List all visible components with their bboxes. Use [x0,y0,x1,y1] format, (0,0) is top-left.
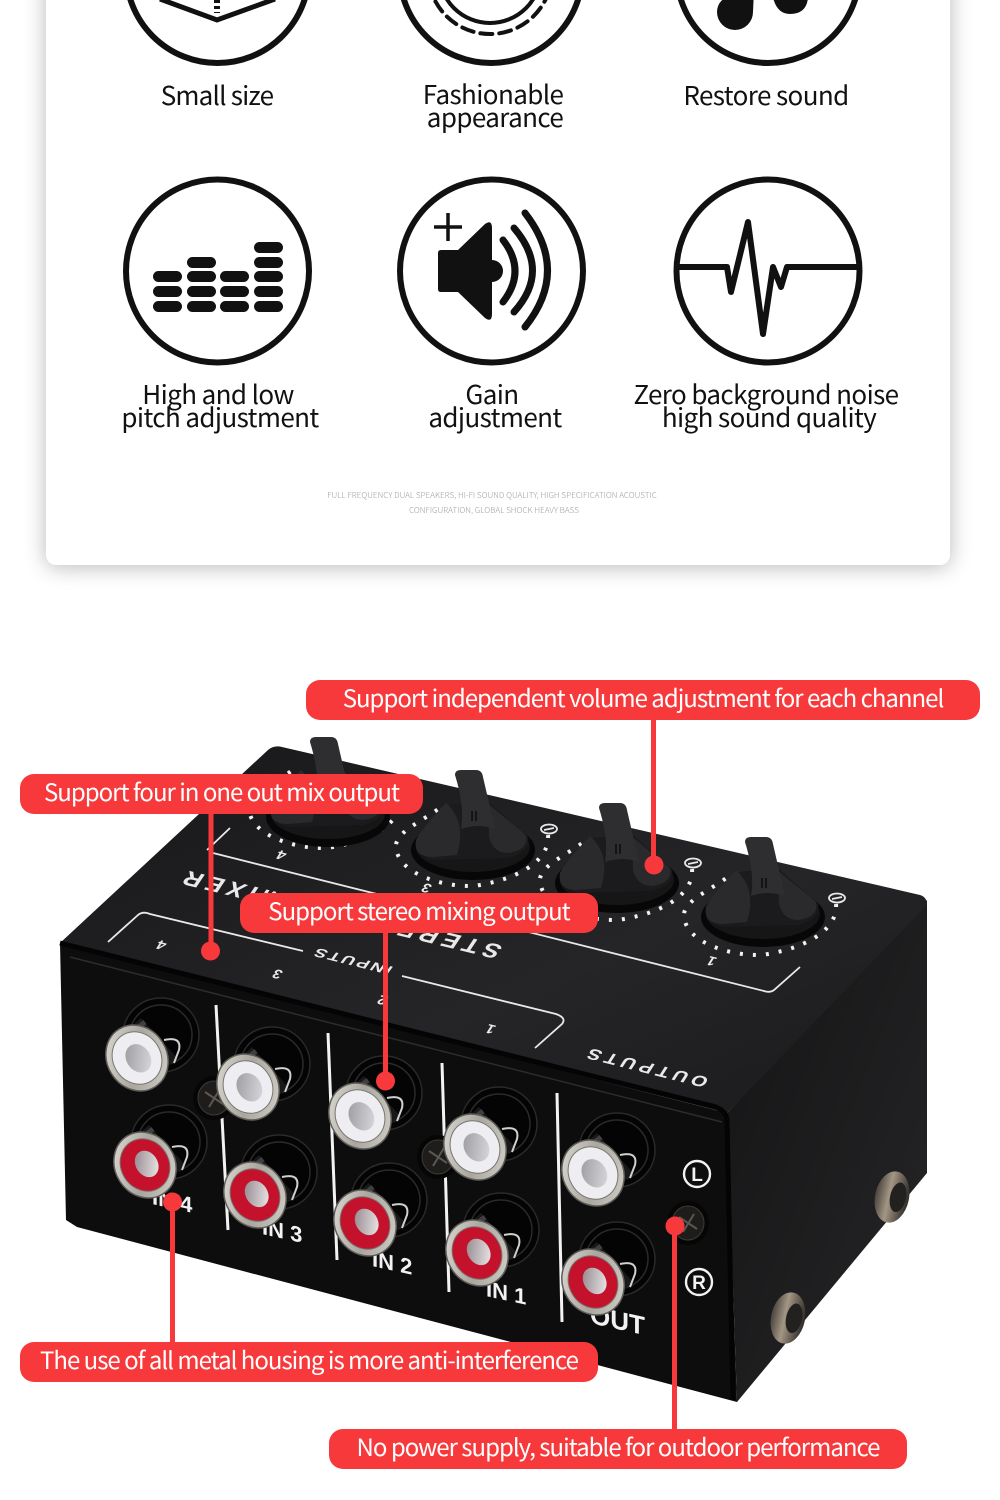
icon: gain speaker [400,180,583,362]
callout: independent volume: Support independent volume adjustment for each channel [343,679,943,714]
caption: zero background noise: Zero background noise [633,375,898,412]
caption: zero background noise [633,375,898,435]
jack labels: OUT [590,1299,645,1341]
icon: fashionable appearance [400,0,582,63]
callout: no power supply: No power supply, suitable for outdoor performance [357,1428,879,1463]
callout leader lines [163,715,684,1432]
icon: zero noise pulse [676,180,860,362]
jack labels [152,1184,645,1341]
printed text on top face: INPUTS [308,945,396,977]
caption: pitch adjustment: High and low [142,375,294,412]
icon: restore sound [676,0,860,63]
printed text on top face [153,846,720,1091]
printed text on top face: 1 [704,953,720,968]
volume dial scales [249,766,836,955]
L and R markers: R [692,1273,706,1294]
caption: gain adjustment: Gain [465,375,519,412]
printed text on top face: STEREO [364,910,507,963]
caption: gain adjustment [428,375,562,435]
icon grid [123,0,862,366]
jack labels: IN 3 [262,1214,302,1248]
icon: equalizer [126,180,309,362]
channel dividers [216,1005,562,1322]
L and R markers [684,1161,712,1295]
caption: fashionable appearance: appearance [427,98,563,135]
printed text on top face: 4 [153,936,170,952]
panel: features card [46,0,950,565]
callout: metal housing: The use of all metal housing is more anti-interference [40,1341,578,1376]
fine print: FULL FREQUENCY DUAL SPEAKERS, HI-FI SOUND QUALITY, HIGH SPECIFICATION ACOUSTIC [327,490,657,501]
printed text on top face: 4 [273,846,290,862]
caption: pitch adjustment [121,375,319,435]
caption: pitch adjustment: pitch adjustment [121,398,319,435]
printed text on top face: 1 [483,1021,499,1036]
caption: restore sound: Restore sound [683,76,849,113]
caption: gain adjustment: adjustment [428,398,562,435]
callout: four in one out: Support four in one out mix output [44,773,399,808]
jack labels: IN 1 [486,1276,526,1310]
printed text on top face: 3 [419,880,435,895]
L and R markers: L [691,1165,703,1186]
printed text on top face: MIXER [173,865,288,911]
caption: zero background noise: high sound quality [662,398,876,435]
RCA jacks [94,998,655,1296]
printed text on top face: OUTPUTS [579,1044,712,1091]
side screws [766,1168,914,1347]
caption: fashionable appearance: Fashionable [423,75,563,112]
caption: small size: Small size [161,76,273,113]
icon: small size [126,0,309,63]
panel markings on top face [108,828,800,1048]
red RCA faces [102,1120,636,1327]
callout: stereo mixing: Support stereo mixing output [268,892,570,927]
screws on front [193,1076,709,1245]
fine print [327,490,657,516]
device body [60,746,927,1402]
caption: fashionable appearance [423,75,563,135]
printed text on top face: 2 [375,992,391,1007]
zero marks [541,824,845,902]
fine print: CONFIGURATION, GLOBAL SHOCK HEAVY BASS [409,505,579,516]
jack labels: IN 2 [372,1246,412,1280]
printed text on top face: 3 [270,966,286,981]
jack labels: IN 4 [152,1184,193,1218]
knobs [266,737,825,947]
